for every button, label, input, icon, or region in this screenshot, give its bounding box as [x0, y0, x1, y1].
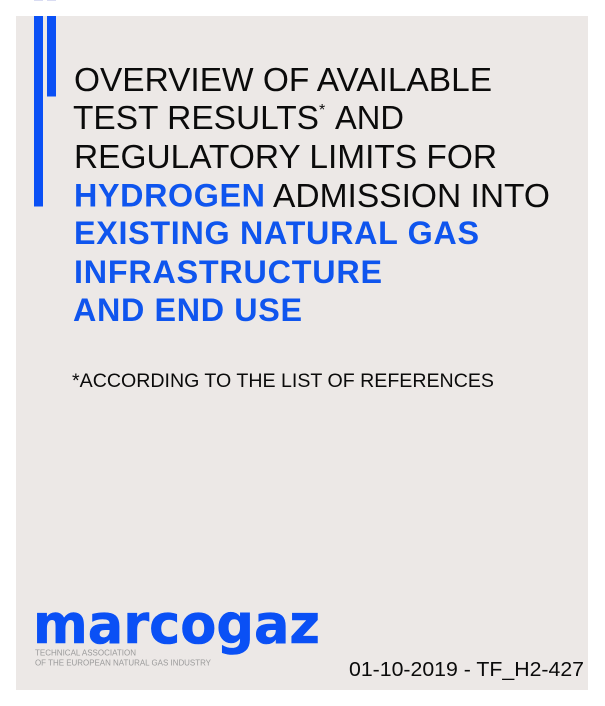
title: OVERVIEW OF AVAILABLE	[74, 61, 492, 98]
top edge marks	[34, 0, 56, 1]
logo: marcogaz: OF THE EUROPEAN NATURAL GAS INDUSTRY	[35, 658, 212, 668]
title: AND	[335, 99, 404, 136]
logo: marcogaz: TECHNICAL ASSOCIATION	[35, 648, 136, 658]
title: HYDROGEN	[74, 178, 265, 214]
title	[73, 61, 550, 328]
title: EXISTING NATURAL GAS	[74, 215, 479, 251]
title: INFRASTRUCTURE	[74, 254, 382, 290]
title: AND END USE	[73, 292, 302, 328]
title: *	[319, 102, 325, 119]
title: ADMISSION INTO	[273, 177, 550, 214]
accent bars	[34, 16, 56, 206]
title: REGULATORY LIMITS FOR	[74, 138, 497, 175]
footnote: *ACCORDING TO THE LIST OF REFERENCES	[72, 370, 494, 392]
logo: marcogaz: marcogaz	[33, 593, 320, 656]
document reference: 01-10-2019 - TF_H2-427	[349, 659, 584, 681]
title: TEST RESULTS	[73, 99, 319, 136]
